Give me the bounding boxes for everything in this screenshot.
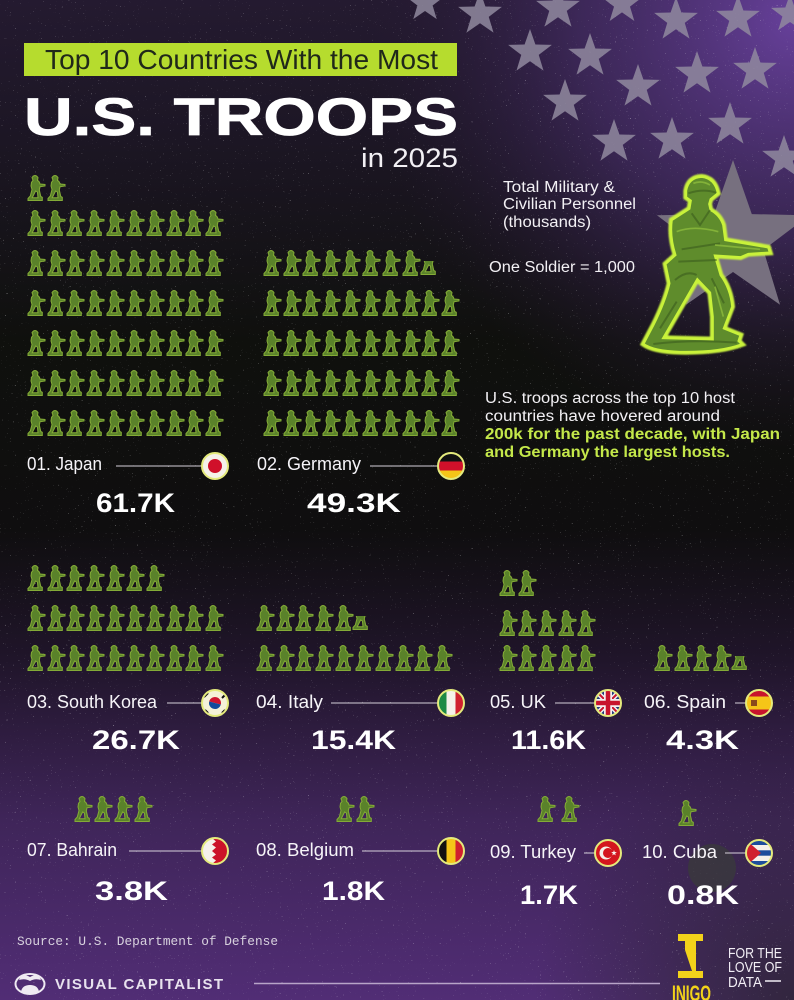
panel: Japan [27, 176, 228, 518]
label: Spain: 06. Spain [644, 692, 726, 712]
flag: Spain [746, 690, 772, 716]
panel: Bahrain [27, 796, 228, 906]
icon: Inigo I mark [678, 934, 703, 978]
callout text [485, 390, 780, 461]
label: Japan: 01. Japan [27, 454, 102, 474]
stars decoration [406, 0, 794, 305]
tagline: LOVE OF [728, 960, 782, 976]
source: Source: U.S. Department of Defense [17, 935, 278, 949]
flag: Bahrain [202, 838, 228, 864]
panel: UK [490, 570, 621, 755]
title banner: Top 10 Countries With the Most [45, 44, 438, 75]
value: UK: 11.6K [511, 725, 587, 755]
value: Italy: 15.4K [311, 725, 397, 755]
label: Turkey: 09. Turkey [490, 842, 576, 862]
logo: Visual Capitalist [16, 974, 223, 994]
panel: South Korea [27, 566, 228, 755]
panel: Germany [257, 250, 464, 518]
icon: Visual Capitalist mark [16, 974, 44, 994]
callout text: and Germany the largest hosts. [485, 444, 730, 461]
flag: Cuba [746, 840, 772, 866]
tagline: FOR THE [728, 946, 782, 962]
value: Germany: 49.3K [307, 488, 402, 518]
soldiers: Spain [655, 644, 749, 670]
value: Turkey: 1.7K [520, 880, 578, 910]
soldiers: Cuba [679, 800, 696, 826]
soldiers: Italy [257, 604, 452, 670]
callout text: 200k for the past decade, with Japan [485, 426, 780, 443]
legend text: One Soldier = 1,000 [489, 259, 635, 276]
label: Belgium: 08. Belgium [256, 840, 354, 860]
soldiers: Germany [264, 250, 459, 436]
panel: Turkey [490, 796, 621, 910]
value: South Korea: 26.7K [92, 725, 181, 755]
callout text: U.S. troops across the top 10 host [485, 390, 736, 407]
tagline: DATA [728, 975, 762, 991]
panel: Spain [644, 644, 772, 755]
soldiers: Japan [28, 176, 223, 436]
value: Belgium: 1.8K [322, 876, 386, 906]
label: Cuba: 10. Cuba [642, 842, 718, 862]
tagline [728, 946, 782, 991]
soldiers: Turkey [538, 796, 579, 822]
legend text: (thousands) [503, 214, 591, 231]
panel: Cuba [642, 800, 772, 910]
flag: Turkey [595, 840, 621, 866]
legend text [489, 179, 636, 276]
label: UK: 05. UK [490, 692, 546, 712]
label: Germany: 02. Germany [257, 454, 361, 474]
legend text: Civilian Personnel [503, 196, 636, 213]
flag: Belgium [438, 838, 464, 864]
flag: South Korea [202, 690, 228, 716]
soldiers: Belgium [337, 796, 374, 822]
callout text: countries have hovered around [485, 408, 720, 425]
smudge [688, 844, 736, 892]
logo: Visual Capitalist: VISUAL CAPITALIST [55, 976, 223, 993]
value: Cuba: 0.8K [667, 880, 740, 910]
soldiers: Bahrain [75, 796, 152, 822]
flag: UK [595, 690, 621, 716]
logo: Inigo [672, 934, 711, 1000]
panel: Belgium [256, 796, 464, 906]
value: Japan: 61.7K [96, 488, 176, 518]
label: Italy: 04. Italy [256, 692, 323, 712]
footer rule [254, 982, 660, 984]
flag: Japan [202, 453, 228, 479]
flag: Italy [438, 690, 464, 716]
soldiers: South Korea [28, 566, 223, 670]
subheading: in 2025: in 2025 [361, 143, 458, 173]
soldiers: UK [500, 570, 595, 670]
label: South Korea: 03. South Korea [27, 692, 158, 712]
heading: U.S. TROOPS: U.S. TROOPS [24, 88, 458, 147]
icon: large toy soldier [643, 177, 770, 352]
value: Bahrain: 3.8K [95, 876, 169, 906]
flag: Germany [438, 453, 464, 480]
panel: Italy [256, 604, 464, 755]
label: Bahrain: 07. Bahrain [27, 840, 117, 860]
value: Spain: 4.3K [666, 725, 740, 755]
legend text: Total Military & [503, 179, 616, 196]
